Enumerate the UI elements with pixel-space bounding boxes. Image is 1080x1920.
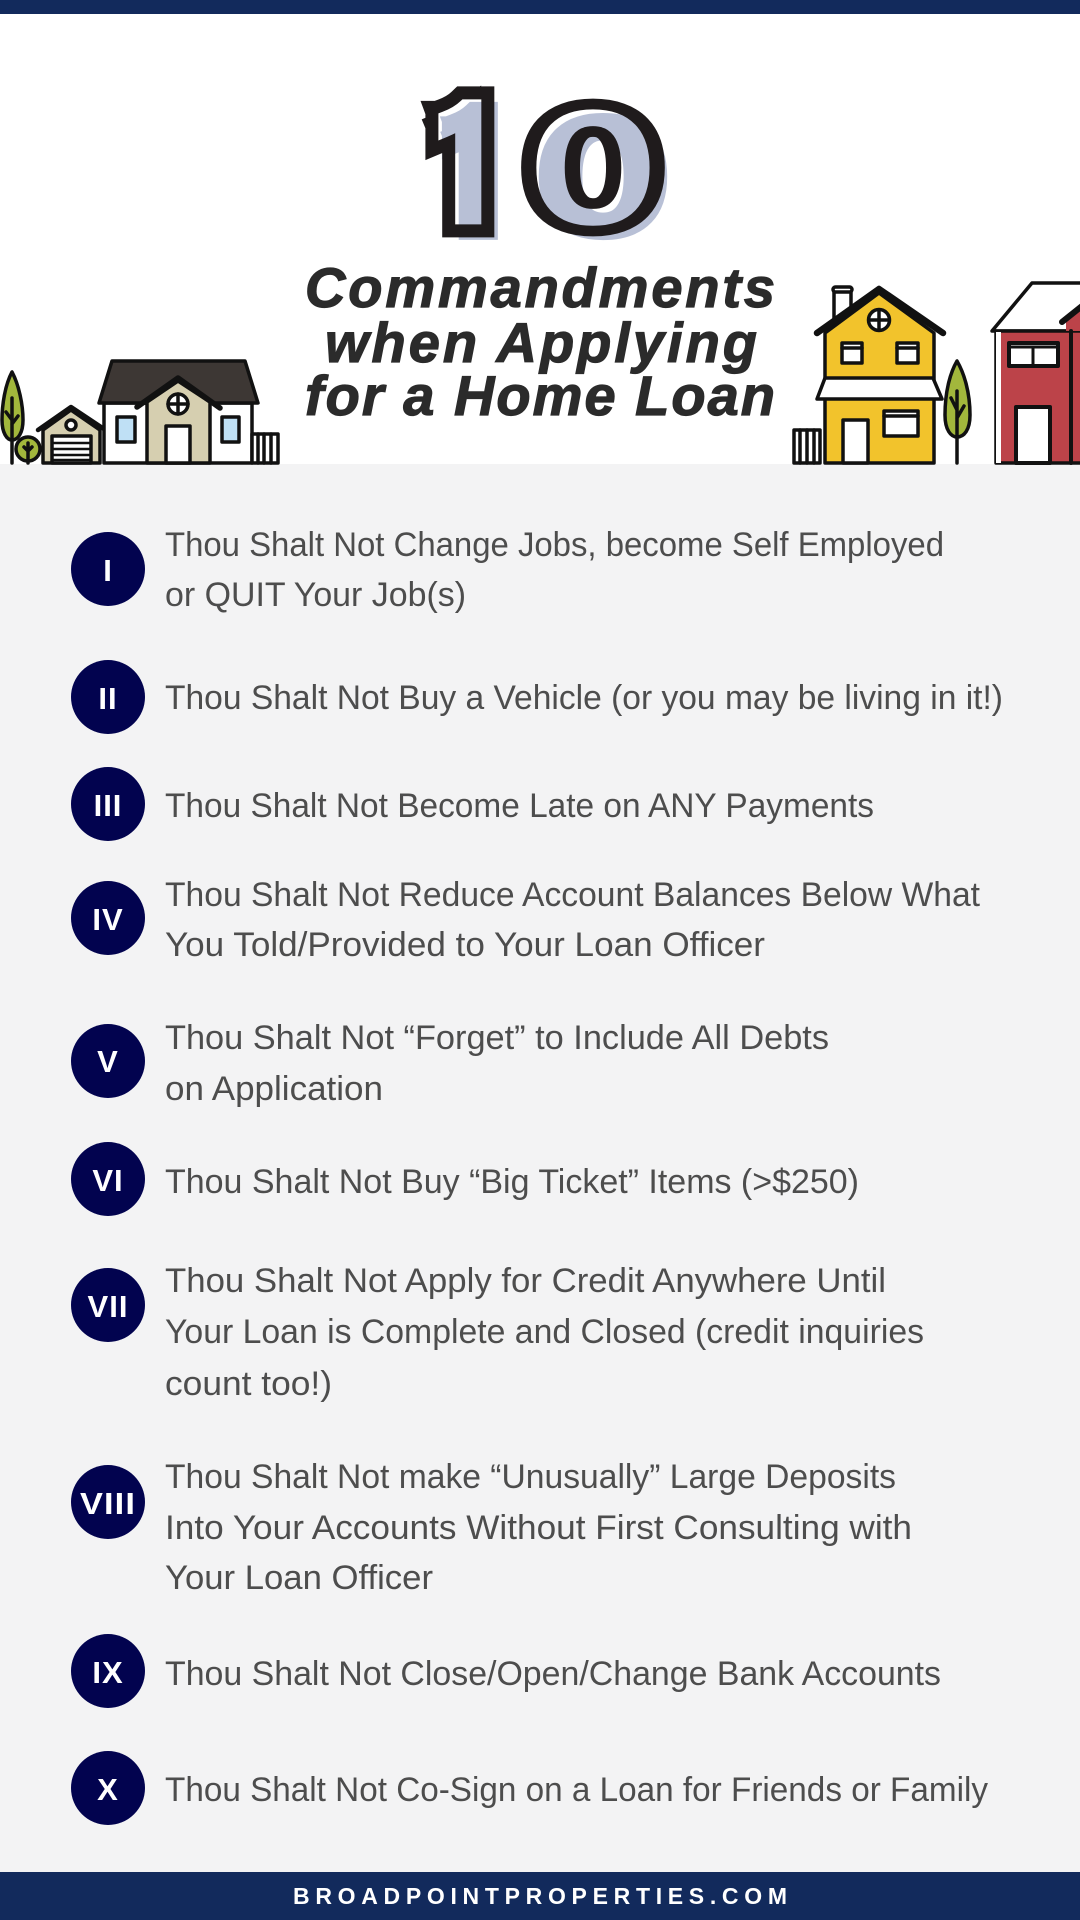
commandment V: on Application <box>165 1070 383 1108</box>
title text: for a Home Loan <box>305 364 775 427</box>
icon: left houses illustration <box>2 361 278 463</box>
icon: tall tree <box>2 372 23 463</box>
commandment II: II <box>98 681 118 716</box>
commandment VIII: Into Your Accounts Without First Consulting with <box>165 1509 912 1547</box>
icon: main house <box>99 361 258 463</box>
title number 10: 0 <box>536 94 670 265</box>
commandment V: V <box>97 1044 119 1079</box>
commandment V: Thou Shalt Not “Forget” to Include All Debts <box>165 1019 829 1057</box>
commandment VIII: VIII <box>80 1486 136 1521</box>
commandment IV: IV <box>92 902 124 937</box>
commandment III: III <box>94 788 122 823</box>
commandment III: Thou Shalt Not Become Late on ANY Payments <box>165 787 874 825</box>
commandment X: X <box>97 1772 119 1807</box>
commandment IV <box>71 876 981 964</box>
icon: yellow house <box>817 287 943 463</box>
footer bar: BROADPOINTPROPERTIES.COM <box>293 1883 787 1909</box>
commandment VII <box>71 1262 924 1403</box>
commandment VIII: Thou Shalt Not make “Unusually” Large Deposits <box>165 1458 896 1496</box>
commandment VII: Your Loan is Complete and Closed (credit inquiries <box>165 1313 924 1351</box>
commandment II: Thou Shalt Not Buy a Vehicle (or you may be living in it!) <box>165 679 1003 717</box>
title text <box>305 256 775 427</box>
top bar <box>0 0 1080 14</box>
commandment I: I <box>103 553 113 588</box>
title number 10 <box>420 86 668 240</box>
commandment V <box>71 1019 829 1108</box>
icon: red house <box>992 283 1080 463</box>
commandment IV: Thou Shalt Not Reduce Account Balances Below What <box>165 876 981 914</box>
title text: Commandments <box>305 256 775 319</box>
commandment X: Thou Shalt Not Co-Sign on a Loan for Friends or Family <box>165 1771 988 1809</box>
commandment IX: IX <box>92 1655 124 1690</box>
icon: right tree <box>945 361 970 463</box>
commandment VII: count too!) <box>165 1365 332 1403</box>
commandment VII: Thou Shalt Not Apply for Credit Anywhere Until <box>165 1262 886 1300</box>
icon: right fence <box>794 430 820 463</box>
title text: when Applying <box>325 311 757 374</box>
commandment VII: VII <box>88 1289 128 1324</box>
icon: small tree <box>16 437 40 463</box>
commandment II <box>71 660 1003 734</box>
commandment I: or QUIT Your Job(s) <box>165 576 466 614</box>
commandment IV: You Told/Provided to Your Loan Officer <box>165 926 765 964</box>
commandment VIII: Your Loan Officer <box>165 1559 433 1597</box>
commandment III <box>71 767 874 841</box>
commandment I <box>71 526 944 614</box>
commandment IX <box>71 1634 941 1708</box>
commandment VIII <box>71 1458 912 1597</box>
commandment X <box>71 1751 988 1825</box>
commandment I: Thou Shalt Not Change Jobs, become Self Employed <box>165 526 944 564</box>
icon: right houses illustration <box>794 283 1080 463</box>
commandment VI <box>71 1142 859 1216</box>
commandment VI: VI <box>92 1163 124 1198</box>
icon: garage <box>38 407 104 463</box>
panel: commandments background <box>0 464 1080 1872</box>
title number 10: 1 <box>436 95 516 255</box>
icon: left fence <box>252 434 278 463</box>
commandment VI: Thou Shalt Not Buy “Big Ticket” Items (>$250) <box>165 1163 859 1201</box>
commandment IX: Thou Shalt Not Close/Open/Change Bank Accounts <box>165 1655 941 1693</box>
footer bar <box>0 1872 1080 1920</box>
